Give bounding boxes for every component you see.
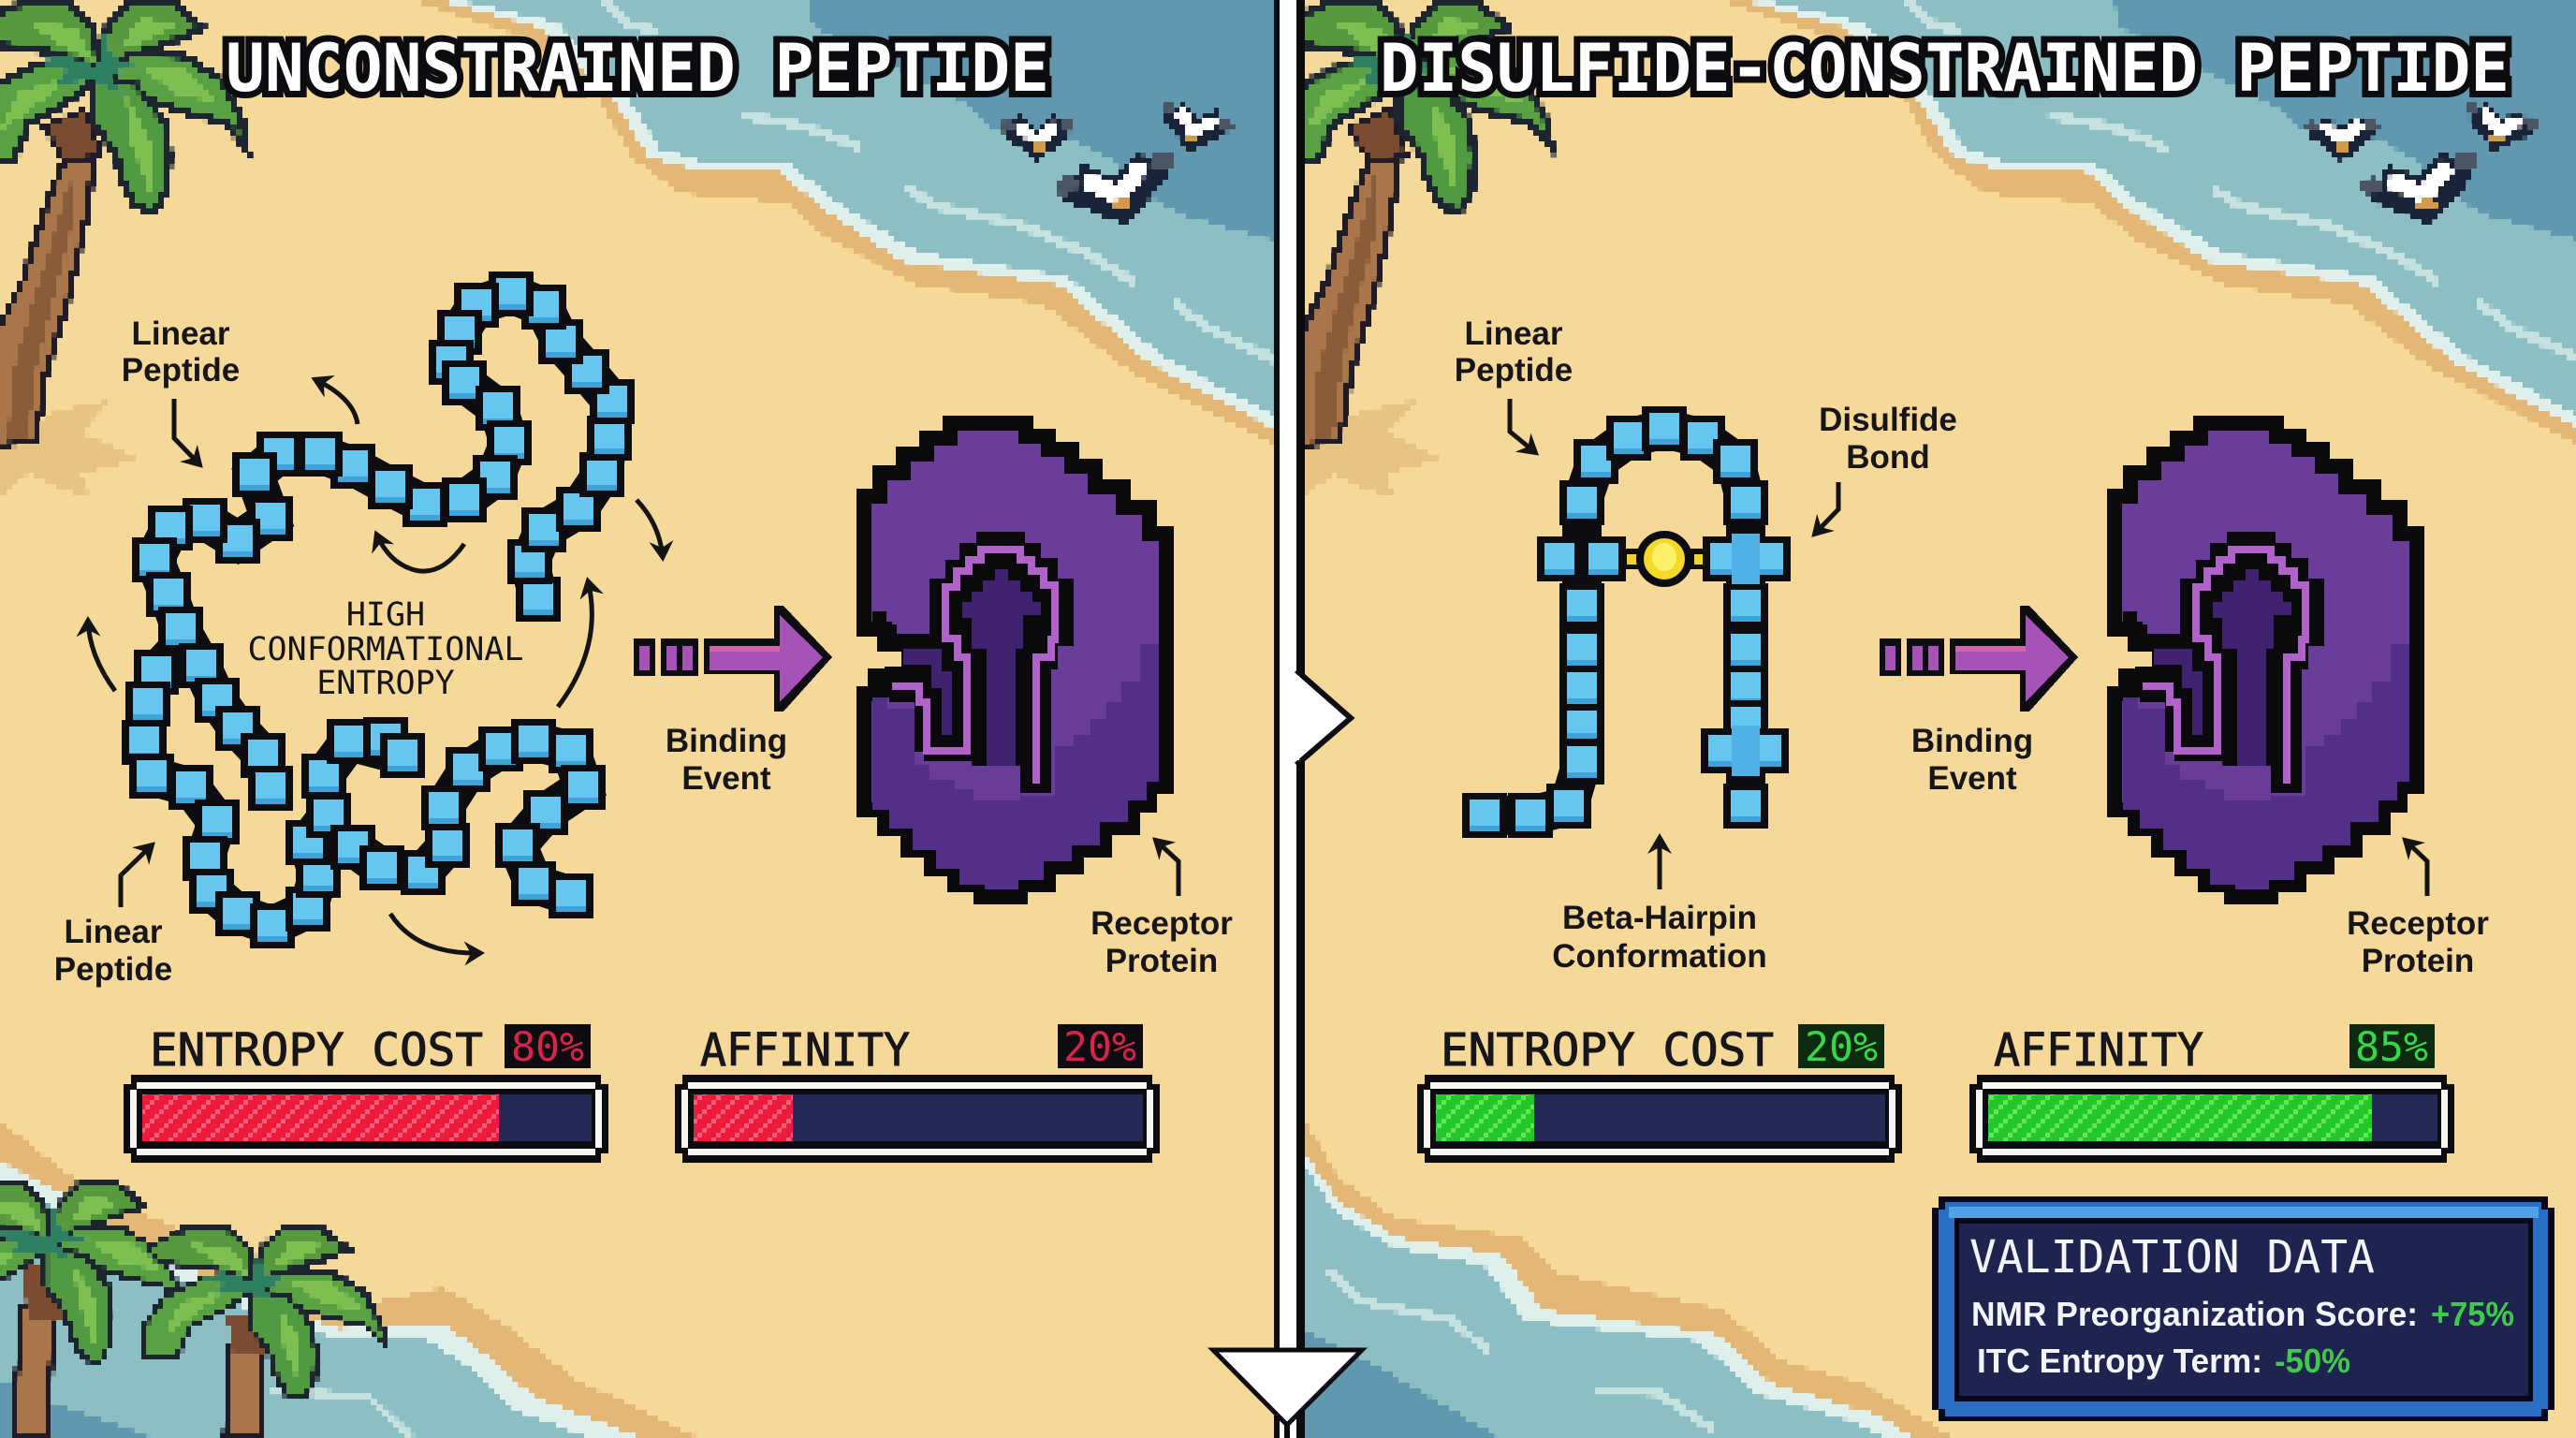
panel: validation data: NMR Preorganization Score: (1971, 1295, 2418, 1333)
receptor protein right (2115, 423, 2417, 897)
affinity meter right: AFFINITY (1994, 1024, 2203, 1077)
affinity meter right (1969, 1024, 2454, 1163)
label: high conformational entropy: ENTROPY (316, 665, 455, 702)
arrow: binding event left (634, 606, 832, 712)
entropy cost meter right (1417, 1024, 1902, 1163)
affinity meter left: AFFINITY (700, 1024, 910, 1077)
motion arrows around chain (88, 379, 663, 953)
arrow: linear peptide right (1510, 399, 1536, 453)
arrow: receptor protein left (1155, 840, 1178, 896)
label: linear peptide bottom: Peptide (54, 951, 172, 988)
receptor protein left (864, 423, 1166, 897)
label: disulfide bond: Disulfide (1819, 402, 1957, 438)
label: linear peptide right: Peptide (1455, 352, 1573, 389)
label: binding event left: Event (681, 760, 771, 797)
label: high conformational entropy: CONFORMATIONAL (247, 631, 524, 668)
entropy cost meter left: 80% (511, 1024, 584, 1071)
label: binding event right: Binding (1911, 723, 2033, 759)
label: binding event right: Event (1927, 760, 2017, 797)
label: beta-hairpin conformation: Conformation (1552, 938, 1767, 975)
arrow: disulfide bond (1814, 482, 1838, 535)
entropy cost meter right: ENTROPY COST (1441, 1024, 1774, 1077)
label: beta-hairpin conformation: Beta-Hairpin (1562, 900, 1757, 936)
entropy cost meter right: 20% (1805, 1024, 1878, 1071)
panel: validation data: -50% (2275, 1342, 2350, 1380)
affinity meter left (675, 1024, 1160, 1163)
center divider with arrows (1213, 0, 1362, 1438)
title: unconstrained peptide: UNCONSTRAINED PEPTIDE (226, 30, 1049, 107)
label: linear peptide bottom: Linear (64, 914, 163, 950)
label: receptor protein right: Receptor (2347, 905, 2489, 942)
arrow: receptor protein right (2405, 840, 2427, 896)
arrow: linear peptide bottom (121, 844, 153, 907)
panel: validation data (1932, 1196, 2554, 1421)
title: disulfide-constrained peptide: DISULFIDE-CONSTRAINED PEPTIDE (1380, 30, 2510, 107)
entropy cost meter left (124, 1024, 608, 1163)
label: high conformational entropy: HIGH (346, 596, 425, 634)
label: linear peptide top: Peptide (122, 352, 240, 389)
label: linear peptide right: Linear (1464, 315, 1563, 352)
arrow: binding event right (1880, 606, 2078, 712)
label: receptor protein right: Protein (2362, 943, 2474, 979)
label: disulfide bond: Bond (1846, 439, 1930, 476)
panel: disulfide-constrained hairpin (1462, 406, 1791, 838)
label: receptor protein left: Receptor (1090, 905, 1233, 942)
panel: validation data: +75% (2431, 1295, 2514, 1333)
panel: validation data: ITC Entropy Term: (1977, 1342, 2262, 1380)
arrow: beta-hairpin (1657, 837, 1662, 889)
affinity meter right: 85% (2355, 1024, 2428, 1071)
label: linear peptide top: Linear (131, 315, 230, 352)
panel: unconstrained peptide chain (122, 271, 635, 948)
affinity meter left: 20% (1063, 1024, 1136, 1071)
label: receptor protein left: Protein (1105, 943, 1218, 979)
entropy cost meter left: ENTROPY COST (150, 1024, 483, 1077)
label: binding event left: Binding (666, 723, 787, 759)
arrow: linear peptide top (174, 399, 200, 465)
panel: validation data: VALIDATION DATA (1969, 1231, 2375, 1284)
